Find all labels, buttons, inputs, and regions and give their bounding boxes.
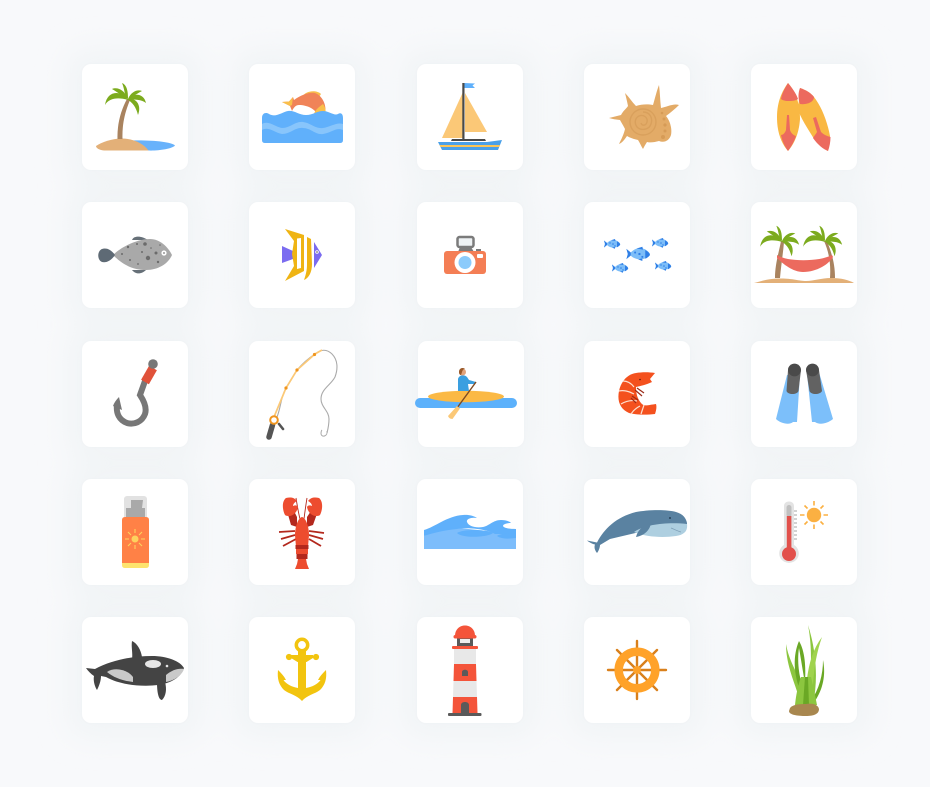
icon: ship wheel bbox=[584, 617, 690, 723]
background halos bbox=[68, 50, 871, 737]
icon: whale bbox=[584, 479, 690, 585]
icon: lobster bbox=[249, 479, 355, 585]
icon: kayak bbox=[415, 341, 524, 447]
icon: surfboards bbox=[751, 64, 857, 170]
icon: angelfish bbox=[249, 202, 355, 308]
icon: thermometer and sun bbox=[751, 479, 857, 585]
icon: orca bbox=[82, 617, 188, 723]
icon: palm island bbox=[82, 64, 188, 170]
icon: fish jumping from water bbox=[249, 64, 355, 170]
icon: anchor bbox=[249, 617, 355, 723]
icon: shrimp bbox=[584, 341, 690, 447]
icon: grey spotted fish bbox=[82, 202, 188, 308]
icon: lighthouse bbox=[417, 617, 523, 723]
icon: fish hook bbox=[82, 341, 188, 447]
icon: sailboat bbox=[417, 64, 523, 170]
icon: conch shell bbox=[584, 64, 690, 170]
icon: seaweed bbox=[751, 617, 857, 723]
icon: palm trees with hammock bbox=[751, 202, 857, 308]
icon: sunscreen bottle bbox=[82, 479, 188, 585]
icon: school of fish bbox=[584, 202, 690, 308]
icon: fishing rod bbox=[249, 341, 355, 447]
icon: ocean wave bbox=[417, 479, 523, 585]
icon: swim fins bbox=[751, 341, 857, 447]
icon: camera bbox=[417, 202, 523, 308]
